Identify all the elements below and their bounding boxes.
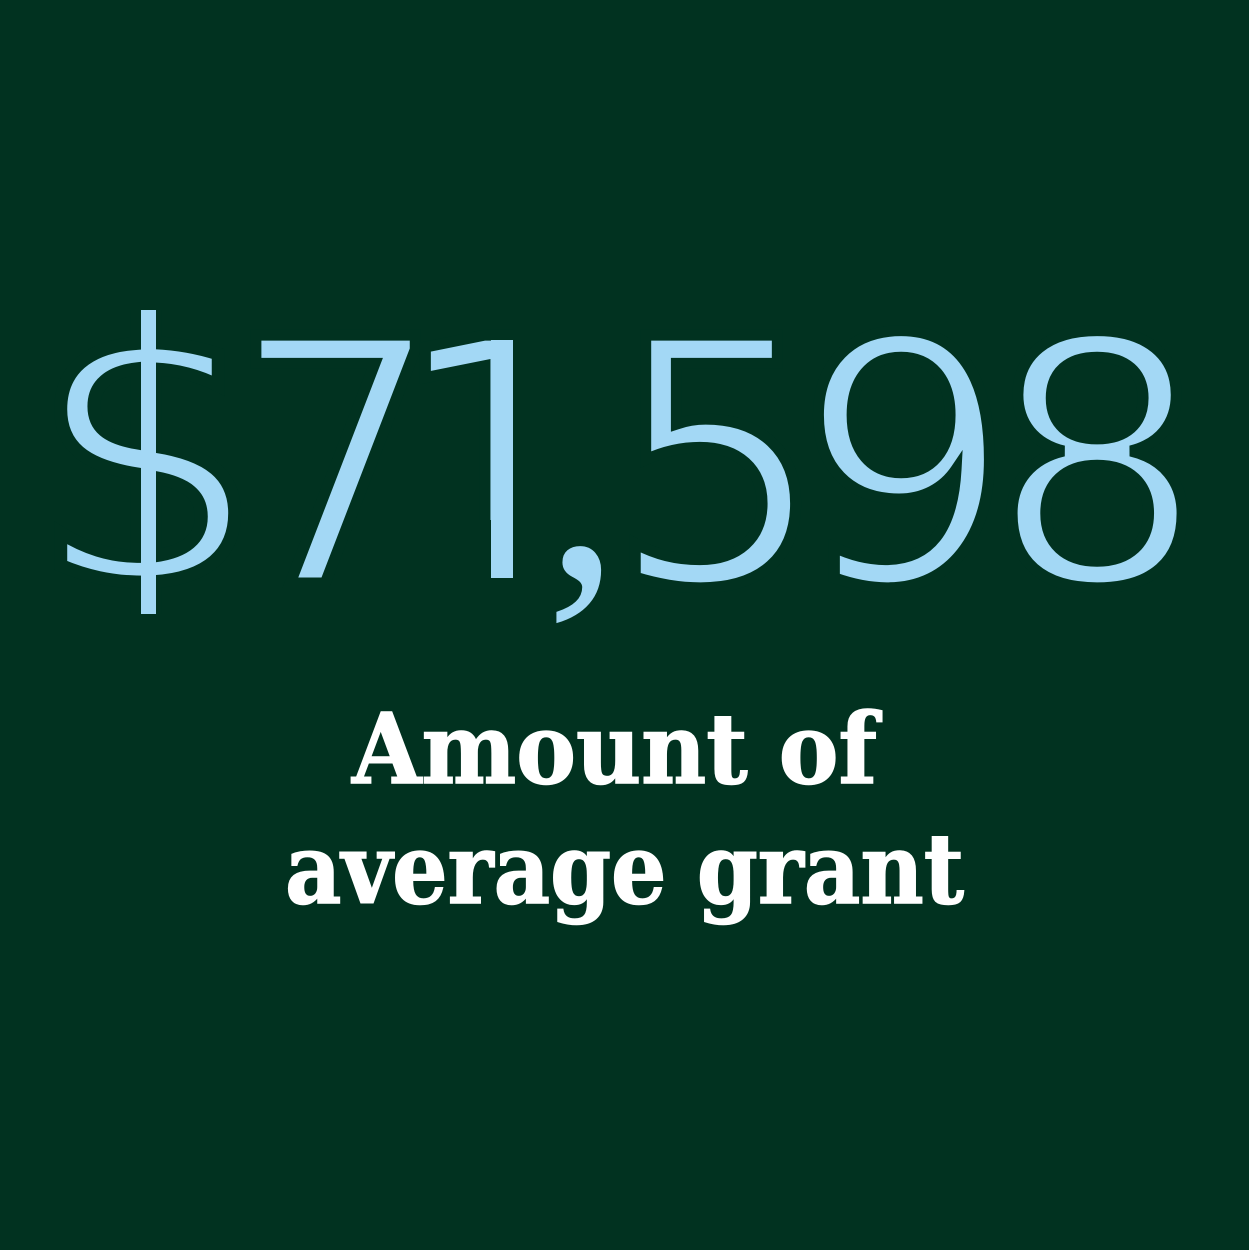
big number: average grant amount: ,	[545, 310, 620, 642]
caption line 1: Amount of	[351, 692, 882, 806]
big number: average grant amount: $	[30, 240, 265, 670]
big number: average grant amount: 598	[609, 268, 1205, 664]
caption: amount of average grant	[285, 692, 964, 926]
big number: average grant amount	[30, 240, 1205, 670]
big number: average grant amount: 71	[228, 268, 604, 664]
caption line 2: average grant	[285, 812, 964, 926]
